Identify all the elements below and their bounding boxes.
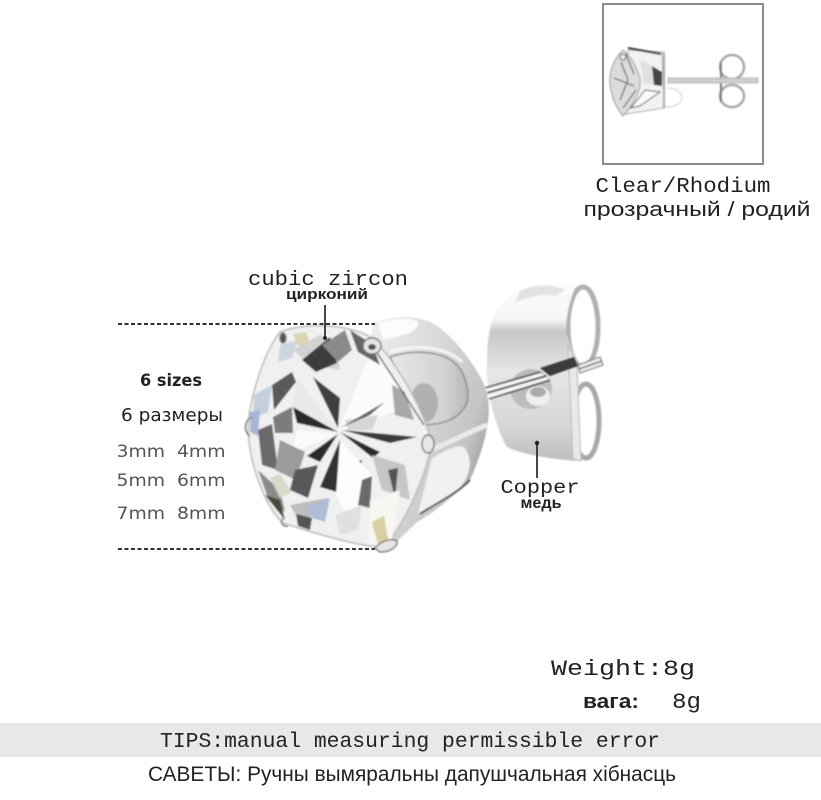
leader line: copper [535,441,539,478]
label: weight russian [583,690,701,715]
label: weight russian: 8g [672,690,701,715]
label: weight russian: вага: [583,691,639,713]
icon: back hole [510,369,552,409]
icon: prongs [245,333,434,552]
icon: upper crown opening [390,352,468,425]
tips band [0,723,821,757]
icon: earring back [487,284,599,461]
label: cubic zircon: cubic zircon [248,269,408,292]
icon: earring post [485,357,603,400]
label: clear rhodium: Clear/Rhodium [596,176,770,199]
icon: back lower loop [573,384,599,458]
label: 3mm 4mm: 3mm 4mm [116,442,226,462]
dashed line: top size marker [118,323,375,325]
label: copper: Copper [500,477,580,499]
leader line: zircon [323,305,327,340]
label: weight: Weight:8g [551,657,695,682]
label: 6 sizes: 6 sizes [140,371,202,390]
label: zircon russian: цирконий [286,286,368,303]
icon: crown setting [360,317,489,548]
icon: cubic zirconia stone [245,326,434,552]
label: tips translation: САВЕТЫ: Ручны вымяральны дапушчальная хібнасць [148,763,676,786]
panel: colour swatch [603,4,763,164]
label: copper russian: медь [520,495,562,512]
label: tips: TIPS:manual measuring permissible error [160,731,660,754]
label: 7mm 8mm: 7mm 8mm [116,504,226,524]
label: 5mm 6mm: 5mm 6mm [116,471,226,491]
icon: back upper loop [568,287,598,367]
icon: lower crown opening [418,446,470,514]
label: 6 sizes russian: 6 размеры [121,405,223,426]
label: clear rhodium russian: прозрачный / родий [584,199,810,221]
icon: small earring [610,48,758,116]
dashed line: bottom size marker [118,548,375,550]
